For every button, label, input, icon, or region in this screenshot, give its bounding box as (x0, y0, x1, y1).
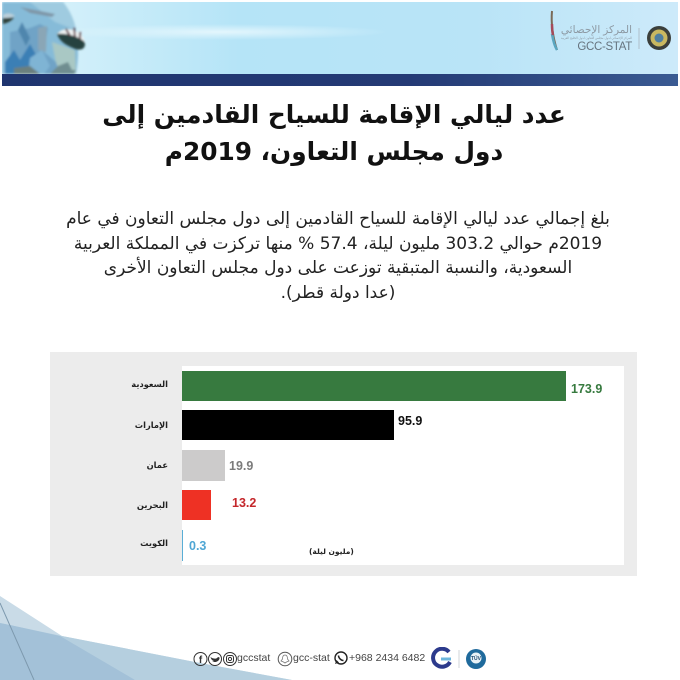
value: Kuwait: 0.3 (189, 539, 206, 553)
title: دول مجلس التعاون، 2019م (165, 137, 503, 166)
bar: Kuwait (182, 530, 183, 561)
bar: Bahrain (182, 490, 211, 520)
value: UAE: 95.9 (398, 414, 422, 428)
logo ribbon (550, 10, 558, 50)
icons: social (194, 652, 237, 666)
divider and GCC seal (638, 26, 671, 50)
logo arabic subtitle: المركز الإحصائي لدول مجلس التعاون لدول الخليج العربية (561, 36, 632, 40)
body paragraph (66, 209, 610, 302)
globe with city (2, 2, 78, 74)
bar: Oman (182, 450, 225, 481)
icon: TUV badge (458, 649, 486, 669)
footer contact bar (194, 651, 425, 666)
handle: gccstat: gccstat (237, 652, 270, 664)
phone number: +968 2434 6482 (349, 652, 425, 664)
logo arabic name: المركز الإحصائي (561, 24, 632, 36)
unit note: (مليون ليلة) (309, 547, 354, 556)
value: Saudi Arabia: 173.9 (571, 382, 602, 396)
icon: certification logo G (431, 647, 452, 669)
label: UAE: الإمارات (135, 420, 168, 430)
bar: UAE (182, 410, 394, 440)
label: Kuwait: الكويت (140, 538, 168, 548)
value: Bahrain: 13.2 (232, 496, 256, 510)
body paragraph: 2019م حوالي 303.2 مليون ليلة، 57.4 % منها تركزت في المملكة العربية (74, 234, 602, 254)
icons: social: f (199, 655, 203, 666)
value: Oman: 19.9 (229, 459, 253, 473)
body paragraph: بلغ إجمالي عدد ليالي الإقامة للسياح القادمين إلى دول مجلس التعاون في عام (66, 209, 610, 229)
icon: whatsapp (334, 651, 348, 665)
handle: gcc-stat: gcc-stat (293, 652, 330, 664)
title (102, 100, 566, 166)
chart plot area (182, 366, 624, 565)
logo latin name: GCC-STAT (577, 41, 632, 53)
parachute (3, 13, 85, 50)
label: Oman: عمان (147, 460, 168, 470)
bar: Saudi Arabia (182, 371, 566, 401)
background wedge (0, 596, 292, 680)
panel: bar chart (50, 352, 637, 576)
header banner (2, 2, 678, 86)
body paragraph: السعودية، والنسبة المتبقية توزعت على دول مجلس التعاون الأخرى (104, 258, 572, 278)
label: Bahrain: البحرين (137, 500, 168, 510)
icon: snapchat (278, 652, 292, 666)
label: Saudi Arabia: السعودية (131, 379, 168, 389)
icon: TUV badge: TÜV (471, 655, 482, 662)
body paragraph: (عدا دولة قطر). (281, 282, 395, 302)
title: عدد ليالي الإقامة للسياح القادمين إلى (102, 100, 566, 129)
logo: GCC-STAT (550, 10, 632, 53)
